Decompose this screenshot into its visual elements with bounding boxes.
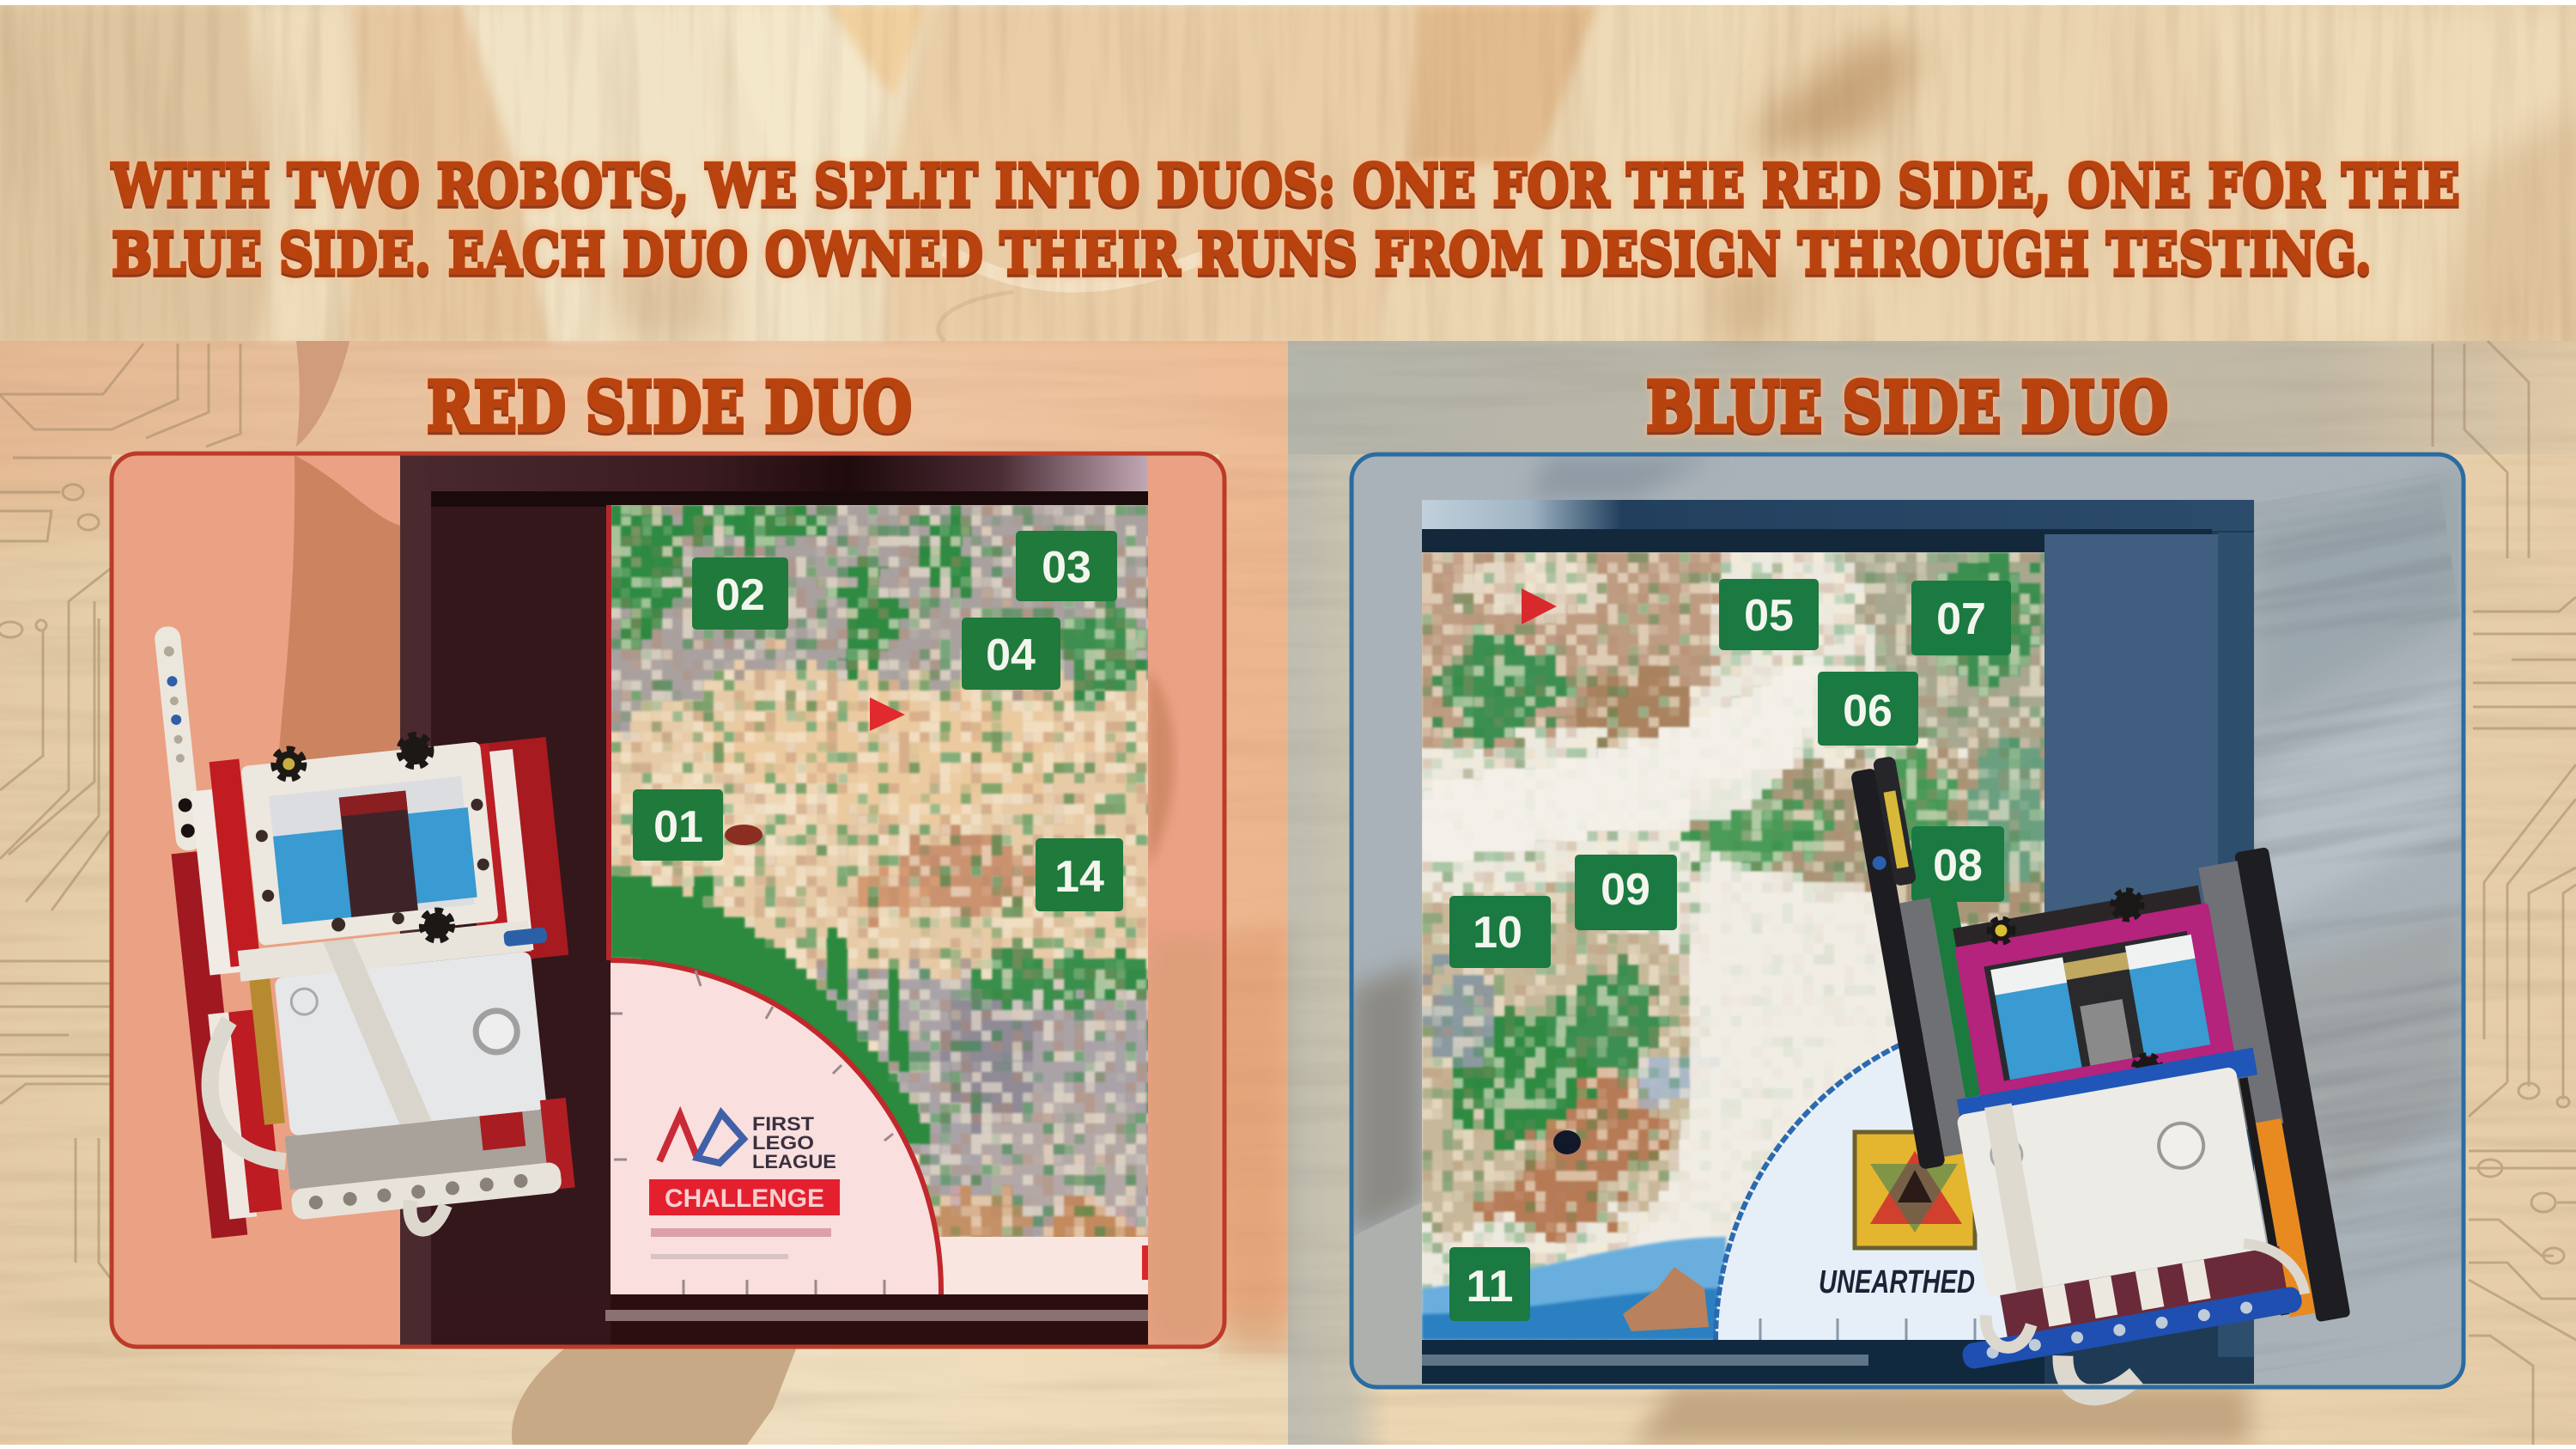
robot frame <box>1954 902 2236 1107</box>
red triangle marker <box>870 697 905 731</box>
mission label 08: 08 <box>1933 841 1983 891</box>
mission label 14 <box>1036 838 1123 911</box>
robot frame <box>240 741 499 946</box>
mat artwork: red side <box>611 505 1148 1294</box>
mission label 06 <box>1818 672 1918 746</box>
mat artwork: blue side <box>1374 515 2078 1340</box>
panel: red side card <box>112 447 1224 1347</box>
mission label 06: 06 <box>1843 686 1893 736</box>
red side background panel <box>0 341 1288 1365</box>
game board: blue side <box>1374 500 2254 1384</box>
heading: blue side duo: BLUE SIDE DUO <box>1646 366 2168 447</box>
logo: first lego league challenge: FIRST <box>752 1113 815 1135</box>
mission label 05 <box>1719 579 1819 650</box>
mission label 09 <box>1575 855 1677 930</box>
robot hub <box>274 951 547 1136</box>
mission label 04 <box>962 618 1060 690</box>
mission label 01: 01 <box>653 802 703 852</box>
mission label 02: 02 <box>715 570 765 620</box>
blue robot <box>1849 695 2356 1419</box>
small brown rock marker <box>725 825 762 845</box>
logo: first lego league challenge: CHALLENGE <box>665 1184 824 1213</box>
mission label 10 <box>1449 896 1551 968</box>
mission label 04: 04 <box>986 630 1036 680</box>
mission label 01 <box>633 789 723 861</box>
mission label 03: 03 <box>1042 543 1091 593</box>
panel: blue side card <box>1352 454 2573 1419</box>
top white edge <box>0 0 2576 5</box>
mission label 14: 14 <box>1054 852 1104 902</box>
mission label 09: 09 <box>1601 865 1650 915</box>
robot hub <box>1956 1066 2267 1297</box>
blue side background panel <box>1288 341 2576 1445</box>
mission label 07: 07 <box>1936 594 1986 644</box>
mission label 11: 11 <box>1467 1262 1513 1312</box>
logo: first lego league challenge: LEGO <box>752 1132 814 1154</box>
red robot <box>148 588 596 1251</box>
bottom white edge <box>0 1445 2576 1449</box>
mission label 07 <box>1911 581 2011 655</box>
mission label 05: 05 <box>1744 591 1794 641</box>
title <box>111 151 2460 287</box>
red triangle marker <box>1522 588 1557 624</box>
mission label 11 <box>1449 1247 1530 1321</box>
logo: first lego league challenge: LEAGUE <box>752 1151 836 1172</box>
mission label 03 <box>1016 531 1117 601</box>
robot blue beam <box>1957 1048 2257 1127</box>
mission label 10: 10 <box>1473 908 1522 958</box>
logo: unearthed badge <box>1819 1132 1975 1300</box>
mission label 02 <box>692 557 788 630</box>
logo: unearthed badge: UNEARTHED <box>1819 1264 1975 1300</box>
logo: first lego league challenge <box>649 1113 840 1259</box>
mission label 08 <box>1911 826 2004 902</box>
heading: red side duo: RED SIDE DUO <box>427 366 912 447</box>
game board: red side <box>400 447 1202 1346</box>
